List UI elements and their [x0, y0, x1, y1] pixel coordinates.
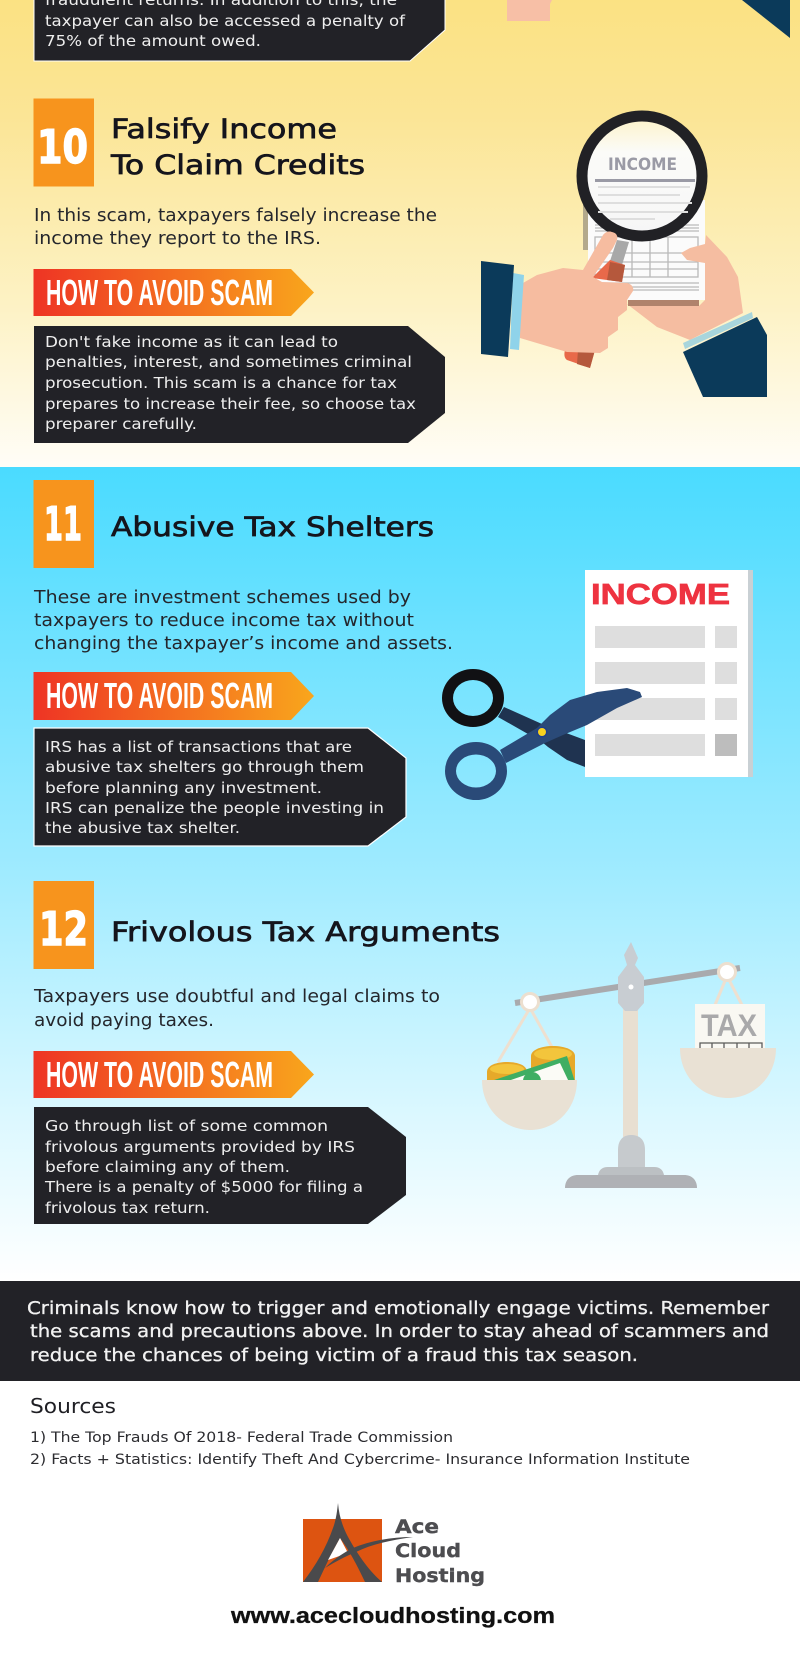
- number badge 12: 12: [39, 902, 88, 956]
- panel: sources: [30, 1394, 690, 1468]
- text: source list: 1) The Top Frauds Of 2018- Federal Trade Commission: [30, 1430, 453, 1446]
- left sleeve: [481, 261, 514, 357]
- text: scam 10 description: income they report to the IRS.: [34, 229, 321, 249]
- panel: yellow background: [0, 0, 800, 467]
- callout box: scam 12 advice: frivolous tax return.: [45, 1199, 210, 1217]
- logo wordmark: Cloud: [395, 1540, 461, 1562]
- heading: Frivolous Tax Arguments: Frivolous Tax Arguments: [111, 917, 500, 948]
- panel: scam 10: [34, 98, 767, 443]
- scale beam: [515, 968, 740, 1003]
- right hand: [627, 235, 743, 340]
- text: scam 12 description: avoid paying taxes.: [34, 1011, 214, 1031]
- right pan with tax document: TAX: [701, 1007, 757, 1043]
- banner: how to avoid scam: [34, 1051, 314, 1098]
- callout box: scam 11 advice: IRS has a list of transactions that are: [45, 738, 352, 756]
- rear blade and arm: [498, 707, 585, 767]
- icon: cropped sleeve remainder: [742, 0, 790, 38]
- magnifier lens: [582, 116, 702, 236]
- text: scam 11 description: These are investment schemes used by: [33, 588, 411, 608]
- blue finger ring: [445, 742, 507, 800]
- number badge 12: [34, 881, 94, 969]
- banner: how to avoid scam: [34, 672, 314, 720]
- front blade and arm: [500, 688, 642, 763]
- black finger ring: [442, 669, 504, 727]
- text: scam 10 description: In this scam, taxpayers falsely increase the: [34, 206, 437, 226]
- banner: how to avoid scam: HOW TO AVOID SCAM: [46, 272, 273, 313]
- panel: scam 12: [33, 881, 776, 1224]
- panel: scam 11: [33, 480, 753, 846]
- right sleeve: [683, 317, 767, 397]
- callout box: scam 11 advice: [34, 728, 406, 846]
- heading: Falsify Income To Claim Credits: [110, 114, 365, 181]
- number badge 10: [34, 98, 94, 186]
- text: scam 11 description: [33, 588, 453, 654]
- text: scam 12 description: [33, 987, 440, 1031]
- callout box: scam 12 advice: before claiming any of them.: [45, 1158, 290, 1176]
- illustration: scissors cutting income form: [442, 570, 753, 800]
- heading: Falsify Income To Claim Credits: Falsify Income: [111, 114, 337, 145]
- heading: Sources: Sources: [30, 1394, 116, 1418]
- banner: how to avoid scam: [34, 269, 314, 316]
- text: scam 10 description: [34, 206, 437, 249]
- magnifier lens: INCOME: [608, 155, 677, 174]
- number badge 10: 10: [37, 120, 88, 174]
- magnifier handle: [564, 240, 629, 368]
- logo wordmark: Ace: [395, 1516, 439, 1538]
- callout box: scam 11 advice: before planning any investment.: [45, 779, 322, 797]
- illustration: balance scale with money and tax: [482, 942, 776, 1188]
- text: scam 11 description: changing the taxpayer’s income and assets.: [34, 634, 453, 654]
- text: source list: [30, 1430, 690, 1468]
- heading: Falsify Income To Claim Credits: To Claim Credits: [110, 150, 365, 181]
- left hand: [520, 231, 633, 353]
- callout box: scam 12 advice: Go through list of some common: [45, 1117, 328, 1135]
- illustration: hands with magnifier over income form: [481, 116, 767, 397]
- panel: closing message bar: the scams and precautions above. In order to stay ahead of scammers and: [30, 1322, 769, 1342]
- left pan with coins and money: [482, 994, 577, 1130]
- text: source list: 2) Facts + Statistics: Identify Theft And Cybercrime- Insurance Information Institute: [30, 1452, 690, 1468]
- logo: Ace Cloud Hosting: [303, 1503, 485, 1587]
- logo wordmark: [395, 1516, 485, 1587]
- callout box: scam 10 advice: penalties, interest, and sometimes criminal: [45, 353, 412, 371]
- website url: www.acecloudhosting.com: [230, 1603, 555, 1628]
- banner: how to avoid scam: HOW TO AVOID SCAM: [46, 675, 273, 716]
- scissors: [442, 669, 642, 800]
- number badge 11: 11: [44, 497, 82, 551]
- panel: blue background: [0, 467, 800, 1281]
- logo mark: [303, 1503, 413, 1582]
- callout box: scam 10 advice: [34, 326, 445, 443]
- callout box: scam 10 advice: Don't fake income as it can lead to: [45, 333, 338, 351]
- callout box: scam 12 advice: [34, 1107, 406, 1224]
- callout box: scam 11 advice: the abusive tax shelter.: [45, 819, 240, 837]
- heading: Abusive Tax Shelters: Abusive Tax Shelters: [111, 512, 434, 543]
- pivot screw: [536, 726, 548, 738]
- callout box: scam 12 advice: There is a penalty of $5000 for filing a: [44, 1178, 363, 1196]
- callout box: scam 10 advice: prepares to increase their fee, so choose tax: [45, 395, 416, 413]
- income form: [585, 570, 753, 777]
- text: scam 11 description: taxpayers to reduce income tax without: [34, 611, 414, 631]
- icon: cropped hand remainder: [507, 0, 552, 21]
- callout box: previous scam advice: taxpayer can also be accessed a penalty of: [45, 12, 406, 30]
- scale stand: [565, 942, 697, 1188]
- panel: closing message bar: [0, 1281, 800, 1381]
- callout box: scam 12 advice: frivolous arguments provided by IRS: [45, 1138, 355, 1156]
- callout box: scam 11 advice: IRS can penalize the people investing in: [45, 799, 384, 817]
- number badge 11: [34, 480, 94, 568]
- form bottom strip: [628, 300, 699, 306]
- callout box: previous scam advice: 75% of the amount owed.: [45, 32, 261, 50]
- form paper: [583, 200, 705, 300]
- panel: closing message bar: reduce the chances of being victim of a fraud this tax season.: [30, 1346, 638, 1366]
- panel: closing message bar: Criminals know how to trigger and emotionally engage victims. Remember: [27, 1299, 770, 1319]
- logo wordmark: Hosting: [395, 1565, 485, 1587]
- right shirt cuff: [683, 312, 753, 349]
- banner: how to avoid scam: HOW TO AVOID SCAM: [46, 1054, 273, 1095]
- panel: previous scam remainder: [34, 0, 790, 61]
- callout box: previous scam advice: [34, 0, 445, 61]
- callout box: scam 10 advice: preparer carefully.: [45, 415, 197, 433]
- text: scam 12 description: Taxpayers use doubtful and legal claims to: [33, 987, 440, 1007]
- left shirt cuff: [510, 273, 524, 350]
- callout box: scam 10 advice: prosecution. This scam is a chance for tax: [45, 374, 397, 392]
- income form: INCOME: [591, 579, 730, 611]
- right pan with tax document: [680, 964, 776, 1098]
- callout box: scam 11 advice: abusive tax shelters go through them: [45, 758, 364, 776]
